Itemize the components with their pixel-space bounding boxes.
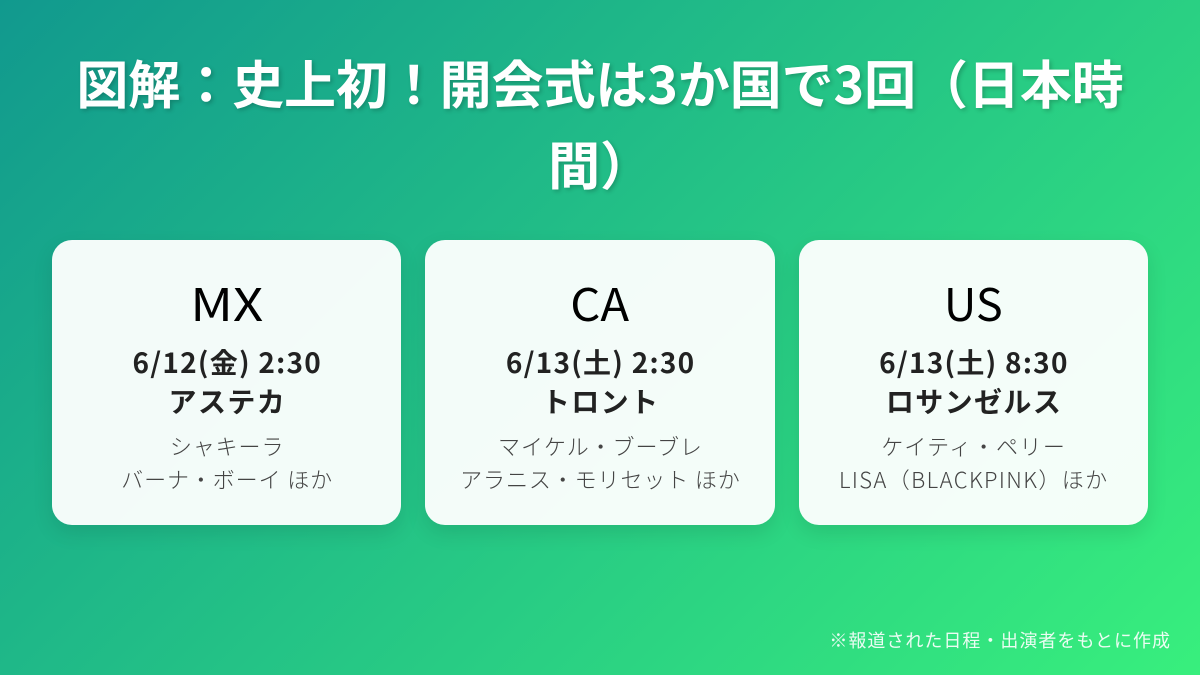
source note: ※報道された日程・出演者をもとに作成 — [829, 627, 1171, 653]
date and time: Canada: 6/13(土) 2:30 — [506, 342, 695, 382]
country code: US: US — [944, 269, 1003, 334]
country code: CA: CA — [571, 269, 629, 334]
venue: Toronto: トロント — [542, 381, 659, 421]
panel: Canada — [425, 240, 775, 525]
performers: Canada: マイケル・ブーブレ — [498, 430, 703, 462]
date and time: Mexico: 6/12(金) 2:30 — [132, 342, 322, 382]
title: 図解：史上初！開会式は3か国で3回（日本時間） — [76, 44, 1124, 200]
performers: United States: ケイティ・ペリー — [881, 430, 1066, 462]
date and time: United States: 6/13(土) 8:30 — [879, 342, 1069, 382]
performers: United States: LISA（BLACKPINK）ほか — [839, 463, 1109, 495]
performers: Mexico: シャキーラ — [170, 430, 284, 462]
country code: MX: MX — [190, 269, 263, 334]
performers: Mexico — [121, 430, 333, 495]
performers: Canada: アラニス・モリセット ほか — [460, 463, 741, 495]
venue: Azteca: アステカ — [169, 381, 286, 421]
venue: Los Angeles: ロサンゼルス — [886, 381, 1062, 421]
performers: United States — [839, 430, 1109, 495]
performers: Mexico: バーナ・ボーイ ほか — [121, 463, 333, 495]
performers: Canada — [460, 430, 741, 495]
panel: United States — [799, 240, 1148, 525]
panel: Mexico — [52, 240, 401, 525]
